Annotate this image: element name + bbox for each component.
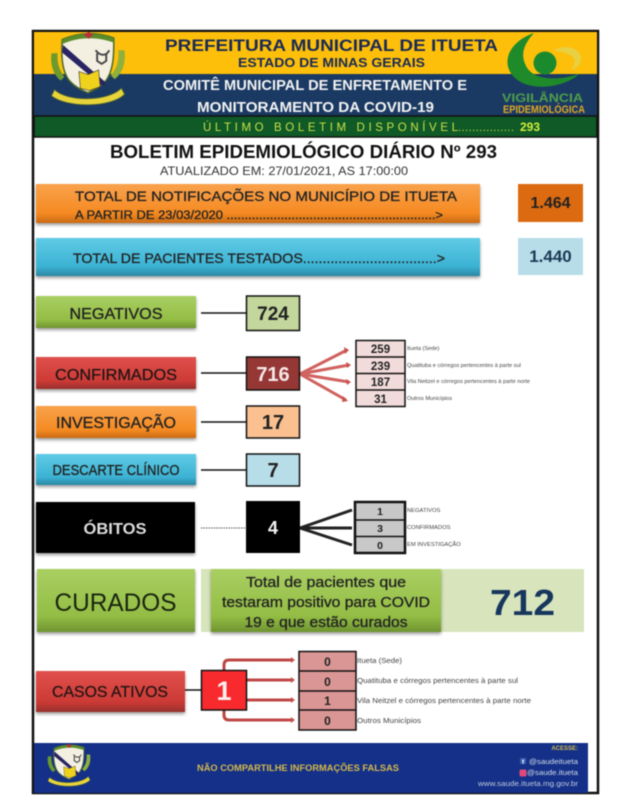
bulletin title: BOLETIM EPIDEMIOLÓGICO DIÁRIO Nº 293 xyxy=(110,141,497,162)
panel: negativos xyxy=(36,296,196,328)
panel: investigacao xyxy=(36,406,196,438)
value: casos ativos xyxy=(202,670,246,710)
committee line 2: MONITORAMENTO DA COVID-19 xyxy=(197,99,434,116)
committee line 1: COMITÊ MUNICIPAL DE ENFRETAMENTO E xyxy=(163,76,467,94)
panel: curados: CURADOS xyxy=(54,589,176,617)
footer facebook handle: @saudeitueta xyxy=(529,757,579,766)
header yellow strip xyxy=(34,32,597,74)
icon: vigilancia epidemiologica logo: EPIDEMIOLÓGICA xyxy=(503,103,585,116)
value: obitos: 4 xyxy=(268,518,278,538)
table: casos ativos by locality: 1 xyxy=(324,694,331,708)
footer message: NÃO COMPARTILHE INFORMAÇÕES FALSAS xyxy=(197,763,399,774)
panel: investigacao: INVESTIGAÇÃO xyxy=(56,415,176,432)
table: confirmados by locality xyxy=(356,340,405,406)
labels: casos ativos localities: Itueta (Sede) xyxy=(357,658,402,665)
table: casos ativos by locality xyxy=(299,652,356,730)
last bulletin strip text: ÚLTIMO BOLETIM DISPONÍVEL xyxy=(203,121,459,134)
footer access label: ACESSE: xyxy=(551,746,578,752)
labels: confirmados localities: Vila Neitzel e córregos pertencentes à parte norte xyxy=(407,379,530,385)
value: notifications: 1.464 xyxy=(530,195,571,212)
value: negativos: 724 xyxy=(257,304,289,325)
panel: curados background xyxy=(201,569,584,632)
value: tested: 1.440 xyxy=(529,247,572,266)
table: confirmados by locality: 259 xyxy=(371,344,390,356)
labels: casos ativos localities xyxy=(357,658,531,725)
panel: obitos xyxy=(36,502,195,553)
panel: curados description: testaram positivo para COVID xyxy=(222,595,430,611)
table: obitos breakdown: 1 xyxy=(377,506,383,518)
panel: confirmados: CONFIRMADOS xyxy=(55,367,177,384)
value: tested xyxy=(518,238,583,275)
value: investigacao: 17 xyxy=(262,412,284,434)
header navy strip xyxy=(34,74,597,116)
icon: municipal coat of arms xyxy=(51,32,125,105)
table: confirmados by locality: 31 xyxy=(374,394,387,406)
panel: total notifications: TOTAL DE NOTIFICAÇÕES NO MUNICÍPIO DE ITUETA xyxy=(75,188,458,204)
panel: descarte clinico xyxy=(36,454,196,485)
value: descarte: 7 xyxy=(267,460,279,482)
panel: casos ativos xyxy=(36,671,185,712)
arrows: obitos breakdown xyxy=(300,510,352,545)
labels: confirmados localities: Itueta (Sede) xyxy=(407,346,439,352)
value: curados: 712 xyxy=(490,582,555,623)
panel: casos ativos: CASOS ATIVOS xyxy=(52,684,168,701)
last bulletin number: 293 xyxy=(520,120,540,134)
labels: confirmados localities: Quatituba e córregos pertencentes à parte sul xyxy=(407,363,521,369)
value: confirmados: 716 xyxy=(256,364,290,386)
table: obitos breakdown: 3 xyxy=(377,523,383,535)
labels: obitos breakdown: EM INVESTIGAÇÃO xyxy=(407,541,461,548)
panel: curados xyxy=(37,569,195,632)
value: notifications xyxy=(518,184,583,222)
panel: total tested: TOTAL DE PACIENTES TESTADOS..................................> xyxy=(73,250,445,266)
table: confirmados by locality: 239 xyxy=(371,361,390,373)
panel: curados description xyxy=(211,569,441,632)
labels: obitos breakdown xyxy=(407,508,461,548)
value: casos ativos: 1 xyxy=(216,676,232,706)
footer instagram handle: @saude.itueta xyxy=(527,768,579,777)
value: negativos xyxy=(246,296,300,330)
last bulletin dots: ................ xyxy=(458,122,514,134)
arrows: casos ativos breakdown xyxy=(224,657,295,723)
panel: curados description: Total de pacientes que xyxy=(246,575,406,591)
labels: confirmados localities: Outros Municípios xyxy=(407,396,452,402)
panel: curados description: 19 e que estão curados xyxy=(244,615,408,631)
table: casos ativos by locality: 0 xyxy=(324,655,331,669)
updated date: ATUALIZADO EM: 27/01/2021, AS 17:00:00 xyxy=(160,164,408,178)
value: descarte xyxy=(246,454,300,486)
table: casos ativos by locality: 0 xyxy=(324,675,331,689)
header state: ESTADO DE MINAS GERAIS xyxy=(238,55,425,70)
panel: total notifications: A PARTIR DE 23/03/2020 ..........................................................> xyxy=(75,210,443,222)
labels: casos ativos localities: Quatituba e córregos pertencentes à parte sul xyxy=(357,678,519,685)
table: obitos breakdown xyxy=(355,502,405,553)
value: investigacao xyxy=(246,406,300,438)
panel: obitos: ÓBITOS xyxy=(84,519,147,538)
header title: PREFEITURA MUNICIPAL DE ITUETA xyxy=(165,36,498,55)
panel: descarte clinico: DESCARTE CLÍNICO xyxy=(52,462,180,479)
icon: facebook: f xyxy=(522,760,525,766)
header band xyxy=(34,32,597,137)
labels: obitos breakdown: NEGATIVOS xyxy=(407,508,441,514)
panel: negativos: NEGATIVOS xyxy=(70,306,162,323)
icon: footer coat of arms xyxy=(48,744,90,786)
footer website: www.saude.itueta.mg.gov.br xyxy=(477,779,579,788)
footer band xyxy=(34,743,588,793)
header green strip xyxy=(34,116,597,137)
panel: total notifications xyxy=(36,184,480,223)
table: confirmados by locality: 187 xyxy=(371,377,390,389)
icon: vigilancia epidemiologica logo xyxy=(502,33,585,116)
panel: total tested xyxy=(36,238,480,276)
value: obitos xyxy=(246,501,300,553)
labels: obitos breakdown: CONFIRMADOS xyxy=(407,525,451,531)
arrows: confirmados breakdown xyxy=(300,347,351,402)
table: casos ativos by locality: 0 xyxy=(324,714,331,728)
table: obitos breakdown: 0 xyxy=(377,540,383,552)
labels: confirmados localities xyxy=(407,346,530,402)
icon: instagram xyxy=(520,770,526,776)
labels: casos ativos localities: Vila Neitzel e córregos pertencentes à parte norte xyxy=(357,698,531,705)
panel: confirmados xyxy=(36,357,196,389)
icon: vigilancia epidemiologica logo: VIGILÂNCIA xyxy=(502,92,583,105)
icon: facebook xyxy=(520,758,526,766)
value: confirmados xyxy=(246,357,300,390)
labels: casos ativos localities: Outros Municípios xyxy=(357,718,422,725)
